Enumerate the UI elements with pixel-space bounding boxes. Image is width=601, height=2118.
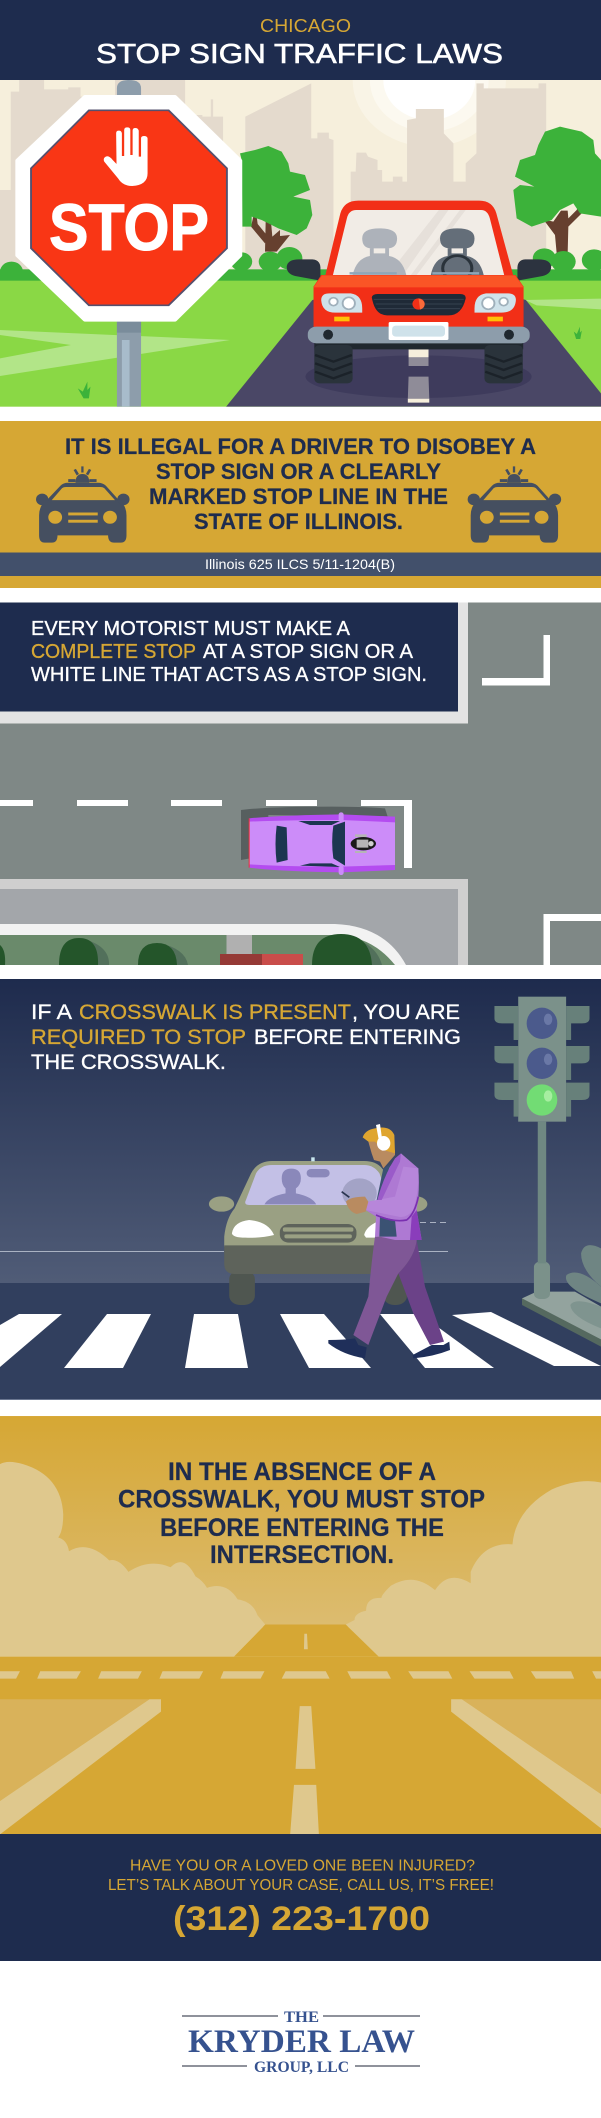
city name: CHICAGO <box>260 15 351 36</box>
left tree <box>240 146 312 252</box>
upper sidewalk <box>0 602 468 724</box>
red car <box>287 201 551 383</box>
crosswalk text: IF A <box>31 1001 72 1024</box>
complete stop callout: WHITE LINE THAT ACTS AS A STOP SIGN. <box>31 663 427 686</box>
intersection text: BEFORE ENTERING THE <box>160 1514 444 1542</box>
panel: illegal to disobey <box>0 421 601 588</box>
crosswalk text: THE CROSSWALK. <box>31 1051 226 1074</box>
pedestrian shoes <box>328 1338 450 1358</box>
main title: STOP SIGN TRAFFIC LAWS <box>96 38 503 69</box>
logo: The Kryder Law Group: GROUP, LLC <box>254 2059 349 2076</box>
logo: The Kryder Law Group: THE <box>284 2009 319 2026</box>
intersection dashes <box>0 1671 601 1679</box>
illegal statement text: STOP SIGN OR A CLEARLY <box>156 459 441 484</box>
crosswalk text <box>31 1001 461 1074</box>
panel: street scene with stop sign and red car <box>0 13 601 407</box>
headlights <box>321 293 516 321</box>
plant leaves <box>566 1245 601 1328</box>
road shoulders <box>0 1699 601 1801</box>
logo: The Kryder Law Group: KRYDER LAW <box>188 2024 415 2060</box>
illegal statement text <box>65 434 536 534</box>
complete stop callout: COMPLETE STOP <box>31 640 196 663</box>
purple car top view <box>241 807 395 875</box>
crosswalk text: REQUIRED TO STOP <box>31 1026 246 1049</box>
logo: The Kryder Law Group <box>182 2009 420 2076</box>
icon: hand <box>104 127 148 186</box>
complete stop callout <box>0 602 458 712</box>
panel: crosswalk scene <box>0 979 601 1400</box>
statute band: Illinois 625 ILCS 5/11-1204(B) <box>205 556 395 572</box>
road <box>226 280 601 407</box>
road markings <box>0 635 601 965</box>
illegal statement text: IT IS ILLEGAL FOR A DRIVER TO DISOBEY A <box>65 434 536 459</box>
intersection text: INTERSECTION. <box>210 1541 394 1569</box>
complete stop callout: EVERY MOTORIST MUST MAKE A <box>31 617 350 640</box>
call to action footer <box>0 1834 601 1961</box>
grille <box>372 294 466 315</box>
front seats <box>350 228 484 281</box>
phone number: (312) 223-1700 <box>173 1900 430 1938</box>
grass tufts <box>78 327 582 398</box>
intersection text <box>118 1458 485 1569</box>
icon: police car left <box>36 466 130 543</box>
call to action text: LET’S TALK ABOUT YOUR CASE, CALL US, IT’S FREE! <box>108 1877 494 1894</box>
stop sign pole <box>117 80 141 407</box>
statute band <box>0 552 601 576</box>
pedestrian head <box>346 1140 395 1214</box>
intersection text: IN THE ABSENCE OF A <box>168 1458 436 1486</box>
bushes <box>0 247 601 282</box>
illegal statement text: MARKED STOP LINE IN THE <box>149 484 448 509</box>
lower sidewalk and median <box>0 879 468 965</box>
right tree <box>513 127 601 253</box>
stop sign <box>18 97 240 320</box>
centre dashes <box>290 1634 319 1834</box>
traffic light <box>494 997 601 1347</box>
pedestrian with headphones <box>328 1124 450 1358</box>
complete stop callout: AT A STOP SIGN OR A <box>203 640 413 663</box>
bumper and plate <box>308 322 530 343</box>
panel: complete stop road diagram <box>0 602 601 965</box>
olive car <box>209 1157 427 1305</box>
icon: police car right <box>468 466 561 543</box>
stop sign word: STOP <box>49 190 209 264</box>
pedestrian legs <box>398 1240 444 1345</box>
call to action text <box>108 1858 494 1894</box>
intersection text: CROSSWALK, YOU MUST STOP <box>118 1486 485 1514</box>
crosswalk text: , YOU ARE <box>352 1001 460 1024</box>
header banner <box>0 0 601 80</box>
crosswalk text: CROSSWALK IS PRESENT <box>79 1001 351 1024</box>
clouds right <box>346 1481 601 1657</box>
crosswalk text: BEFORE ENTERING <box>254 1026 461 1049</box>
pedestrian torso <box>366 1153 422 1240</box>
call to action text: HAVE YOU OR A LOVED ONE BEEN INJURED? <box>130 1858 475 1874</box>
crosswalk stripes <box>0 1312 601 1368</box>
illegal statement text: STATE OF ILLINOIS. <box>194 509 403 534</box>
clouds left <box>0 1462 265 1657</box>
panel: no crosswalk intersection <box>0 1416 601 1834</box>
